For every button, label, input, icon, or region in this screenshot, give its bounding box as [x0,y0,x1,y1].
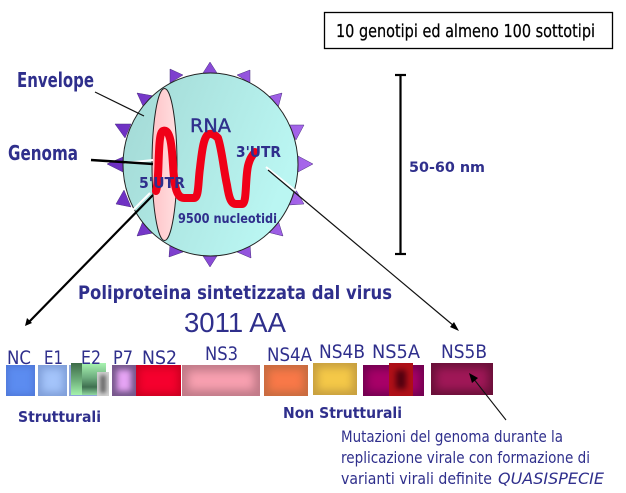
arrow: 3'UTR to NS5B [266,167,459,331]
box: E1 [38,365,67,396]
heading: amino acids: 3011 AA [184,307,286,338]
arrow: mutation note to NS5B [469,373,506,420]
box: NS3 [182,365,260,396]
box: NS5A inner [389,363,413,396]
box: NS4A [264,365,308,396]
E2 back box [69,365,97,396]
note: mutations [341,427,605,488]
note: mutations: Mutazioni del genoma durante la [341,427,563,446]
note: mutations: varianti virali definite [341,469,492,488]
label: 3'UTR: 3'UTR [236,143,281,161]
gene: NS4B: NS4B [319,341,365,363]
label: scale: 50-60 nm [409,160,485,176]
red RNA strand [156,131,255,204]
gene: P7: P7 [113,347,133,369]
box: NS5B [431,363,493,395]
gene: E2: E2 [81,347,101,369]
gene: NS5A: NS5A [372,341,420,363]
virus particle [107,62,313,267]
pointer: genoma [91,160,153,164]
gene: NS3: NS3 [205,343,238,365]
label: 5'UTR: 5'UTR [139,174,185,192]
E2 green block [71,363,106,395]
label: Non Strutturali: Non Strutturali [283,404,402,422]
box: P7 [112,365,136,396]
scale bar [395,75,406,254]
pink cross-section ellipse [152,88,177,240]
gene: NS5B: NS5B [441,341,487,363]
label: Genoma: Genoma [8,141,78,165]
capsid sphere [123,73,298,256]
gene: E1: E1 [44,347,63,369]
envelope spikes [107,62,313,267]
E2 grey block [97,372,109,396]
gene: NS4A: NS4A [267,344,312,366]
E2 dark strip [71,363,82,395]
box: E2 [69,363,109,396]
label: Envelope: Envelope [17,68,94,92]
label: RNA: RNA [190,115,231,137]
pointer: envelope [95,92,144,116]
box: NS4B [313,363,357,395]
box: NS2 [136,365,181,396]
box: NC [6,365,35,396]
gene labels [7,341,487,369]
note: mutations: QUASISPECIE [498,469,605,488]
gene: NS2: NS2 [142,347,177,369]
arrow: 5'UTR to polyprotein start [25,193,153,326]
label: nucleotides: 9500 nucleotidi [178,212,277,227]
heading: polyprotein: Poliproteina sintetizzata dal virus [78,282,392,304]
label: Strutturali: Strutturali [18,408,101,426]
gene: NC: NC [7,347,31,369]
box: NS5A [363,365,424,396]
title box: genotypes [324,12,612,48]
